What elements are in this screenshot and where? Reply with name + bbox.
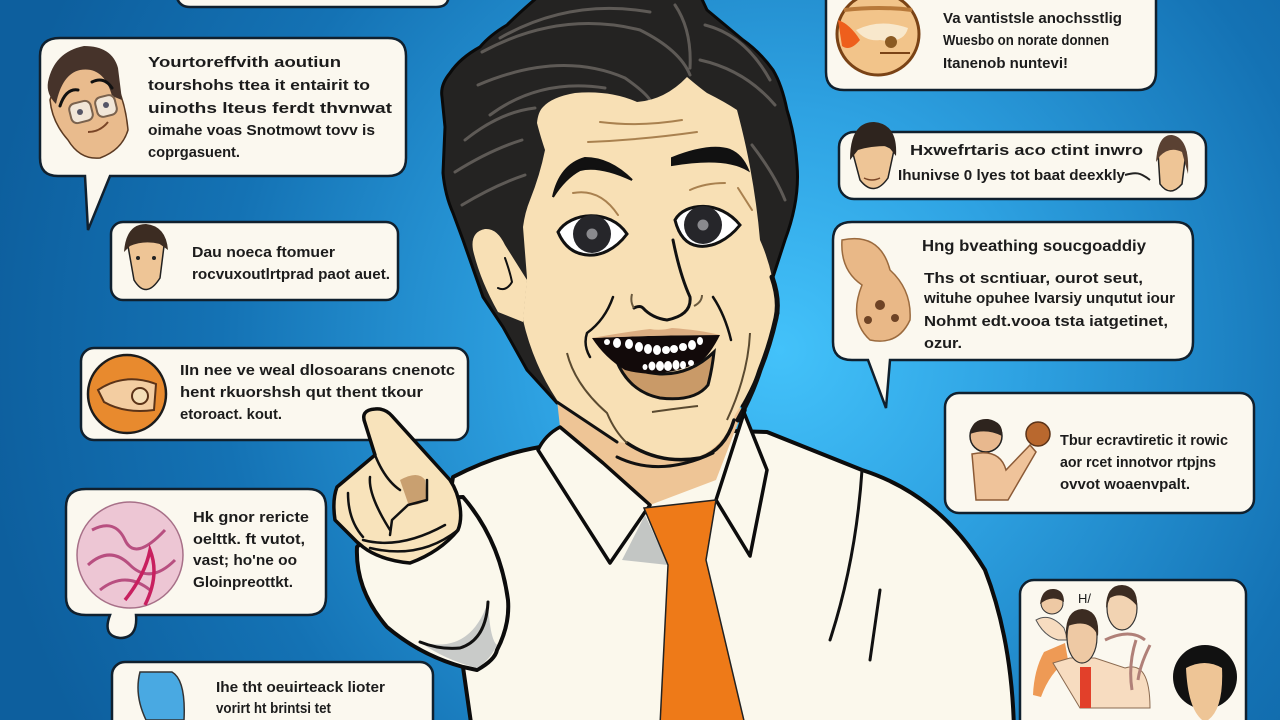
panel: two faces bubble [839, 122, 1206, 199]
eye: left [558, 215, 627, 255]
text block: Ihe tht oeuirteack lioter [216, 679, 385, 696]
text block: tourshohs ttea it entairit to [148, 77, 370, 94]
text block [943, 10, 1122, 72]
text block [192, 244, 390, 283]
tangled tube [1105, 634, 1150, 690]
black hair head [1173, 645, 1237, 709]
small left person [1036, 617, 1068, 640]
shirt body [440, 430, 1014, 720]
eye: right [675, 206, 740, 246]
text block: Ths ot scntiuar, ourot seut, [924, 270, 1143, 287]
text block: Nohmt edt.vooa tsta iatgetinet, [924, 313, 1168, 330]
icon: figure [970, 419, 1050, 500]
orange leg [1033, 643, 1068, 697]
panel: bubble with glasses face [40, 38, 406, 230]
icon: blue figure [138, 672, 184, 720]
face [523, 77, 776, 459]
text block: IIn nee ve weal dlosoarans cnenotc [180, 362, 455, 379]
icon: pink tissue [77, 502, 183, 608]
nose [631, 240, 702, 320]
text block: Hxwefrtaris aco ctint inwro [910, 142, 1143, 159]
smile lines [586, 297, 731, 357]
panel: top right bubble [826, 0, 1156, 90]
collar [538, 410, 767, 565]
center head [1067, 611, 1097, 663]
arm sleeve [357, 497, 508, 670]
icon: anatomy [842, 239, 910, 341]
tie [644, 500, 745, 720]
hair [442, 0, 798, 407]
icon: group of people [1033, 585, 1237, 720]
handwritten label: H/ [1078, 591, 1091, 606]
icon: man with glasses [48, 46, 128, 158]
text block: wituhe opuhee lvarsiy unqutut iour [923, 290, 1175, 307]
ear [472, 229, 527, 322]
text block: Yourtoreffvith aoutiun [148, 54, 341, 71]
text block: Itanenob nuntevi! [943, 55, 1068, 72]
shirt fold lines [830, 470, 880, 660]
text block [216, 679, 385, 717]
mouth [592, 328, 720, 399]
panel: top left clipped bubble [176, 0, 448, 7]
text block: Ihunivse 0 lyes tot baat deexkly [898, 167, 1126, 184]
text block [148, 54, 392, 161]
text block: etoroact. kout. [180, 406, 282, 423]
right head [1107, 586, 1137, 630]
text block: Gloinpreottkt. [193, 574, 293, 591]
panel: figure holding object bubble [945, 393, 1254, 513]
text block: rocvuxoutlrtprad paot auet. [192, 266, 390, 283]
panel: bottom left bubble [112, 662, 433, 720]
panel: small face bubble left [111, 222, 398, 300]
icon: right face [1156, 135, 1188, 191]
text block [1060, 432, 1228, 493]
panel: group of people bubble [1020, 580, 1246, 720]
text block: aor rcet innotvor rtpjns [1060, 454, 1216, 471]
torso [1053, 658, 1150, 708]
text block: vorirt ht brintsi tet [216, 700, 331, 717]
text block: Hk gnor rericte [193, 509, 309, 526]
text block [180, 362, 455, 423]
text block: Hng bveathing soucgoaddiy [922, 238, 1146, 255]
text block: uinoths lteus ferdt thvnwat [148, 100, 392, 117]
text block: oimahe voas Snotmowt tovv is [148, 122, 375, 139]
icon: orange circle [88, 355, 166, 433]
text block [922, 238, 1175, 352]
text block: Va vantistsle anochsstlig [943, 10, 1122, 27]
teeth [604, 337, 703, 371]
text block: coprgasuent. [148, 144, 240, 161]
text block: ozur. [924, 335, 962, 352]
icon: left face [850, 122, 896, 189]
text block: vast; ho'ne oo [193, 552, 297, 569]
icon: small face [124, 224, 168, 290]
eyebrows [553, 158, 632, 197]
panel: eye icon bubble [81, 348, 468, 440]
text block [193, 509, 309, 591]
text block: ovvot woaenvpalt. [1060, 476, 1190, 493]
panel: anatomy bubble [833, 222, 1193, 408]
ear detail [498, 258, 512, 289]
red tie [1080, 667, 1091, 708]
forehead wrinkles [573, 120, 752, 215]
text block: Tbur ecravtiretic it rowic [1060, 432, 1228, 449]
text block: Wuesbo on norate donnen [943, 32, 1109, 49]
neck [557, 380, 743, 505]
panel: pink tissue bubble [66, 489, 326, 638]
text block [898, 142, 1150, 184]
illustration: cartoon man [334, 0, 1014, 720]
text block: hent rkuorshsh qut thent tkour [180, 384, 423, 401]
icon: orange face [837, 0, 919, 75]
jaw lines [738, 277, 777, 420]
hand pointing [334, 409, 461, 563]
text block: Dau noeca ftomuer [192, 244, 335, 261]
text block: oelttk. ft vutot, [193, 531, 305, 548]
